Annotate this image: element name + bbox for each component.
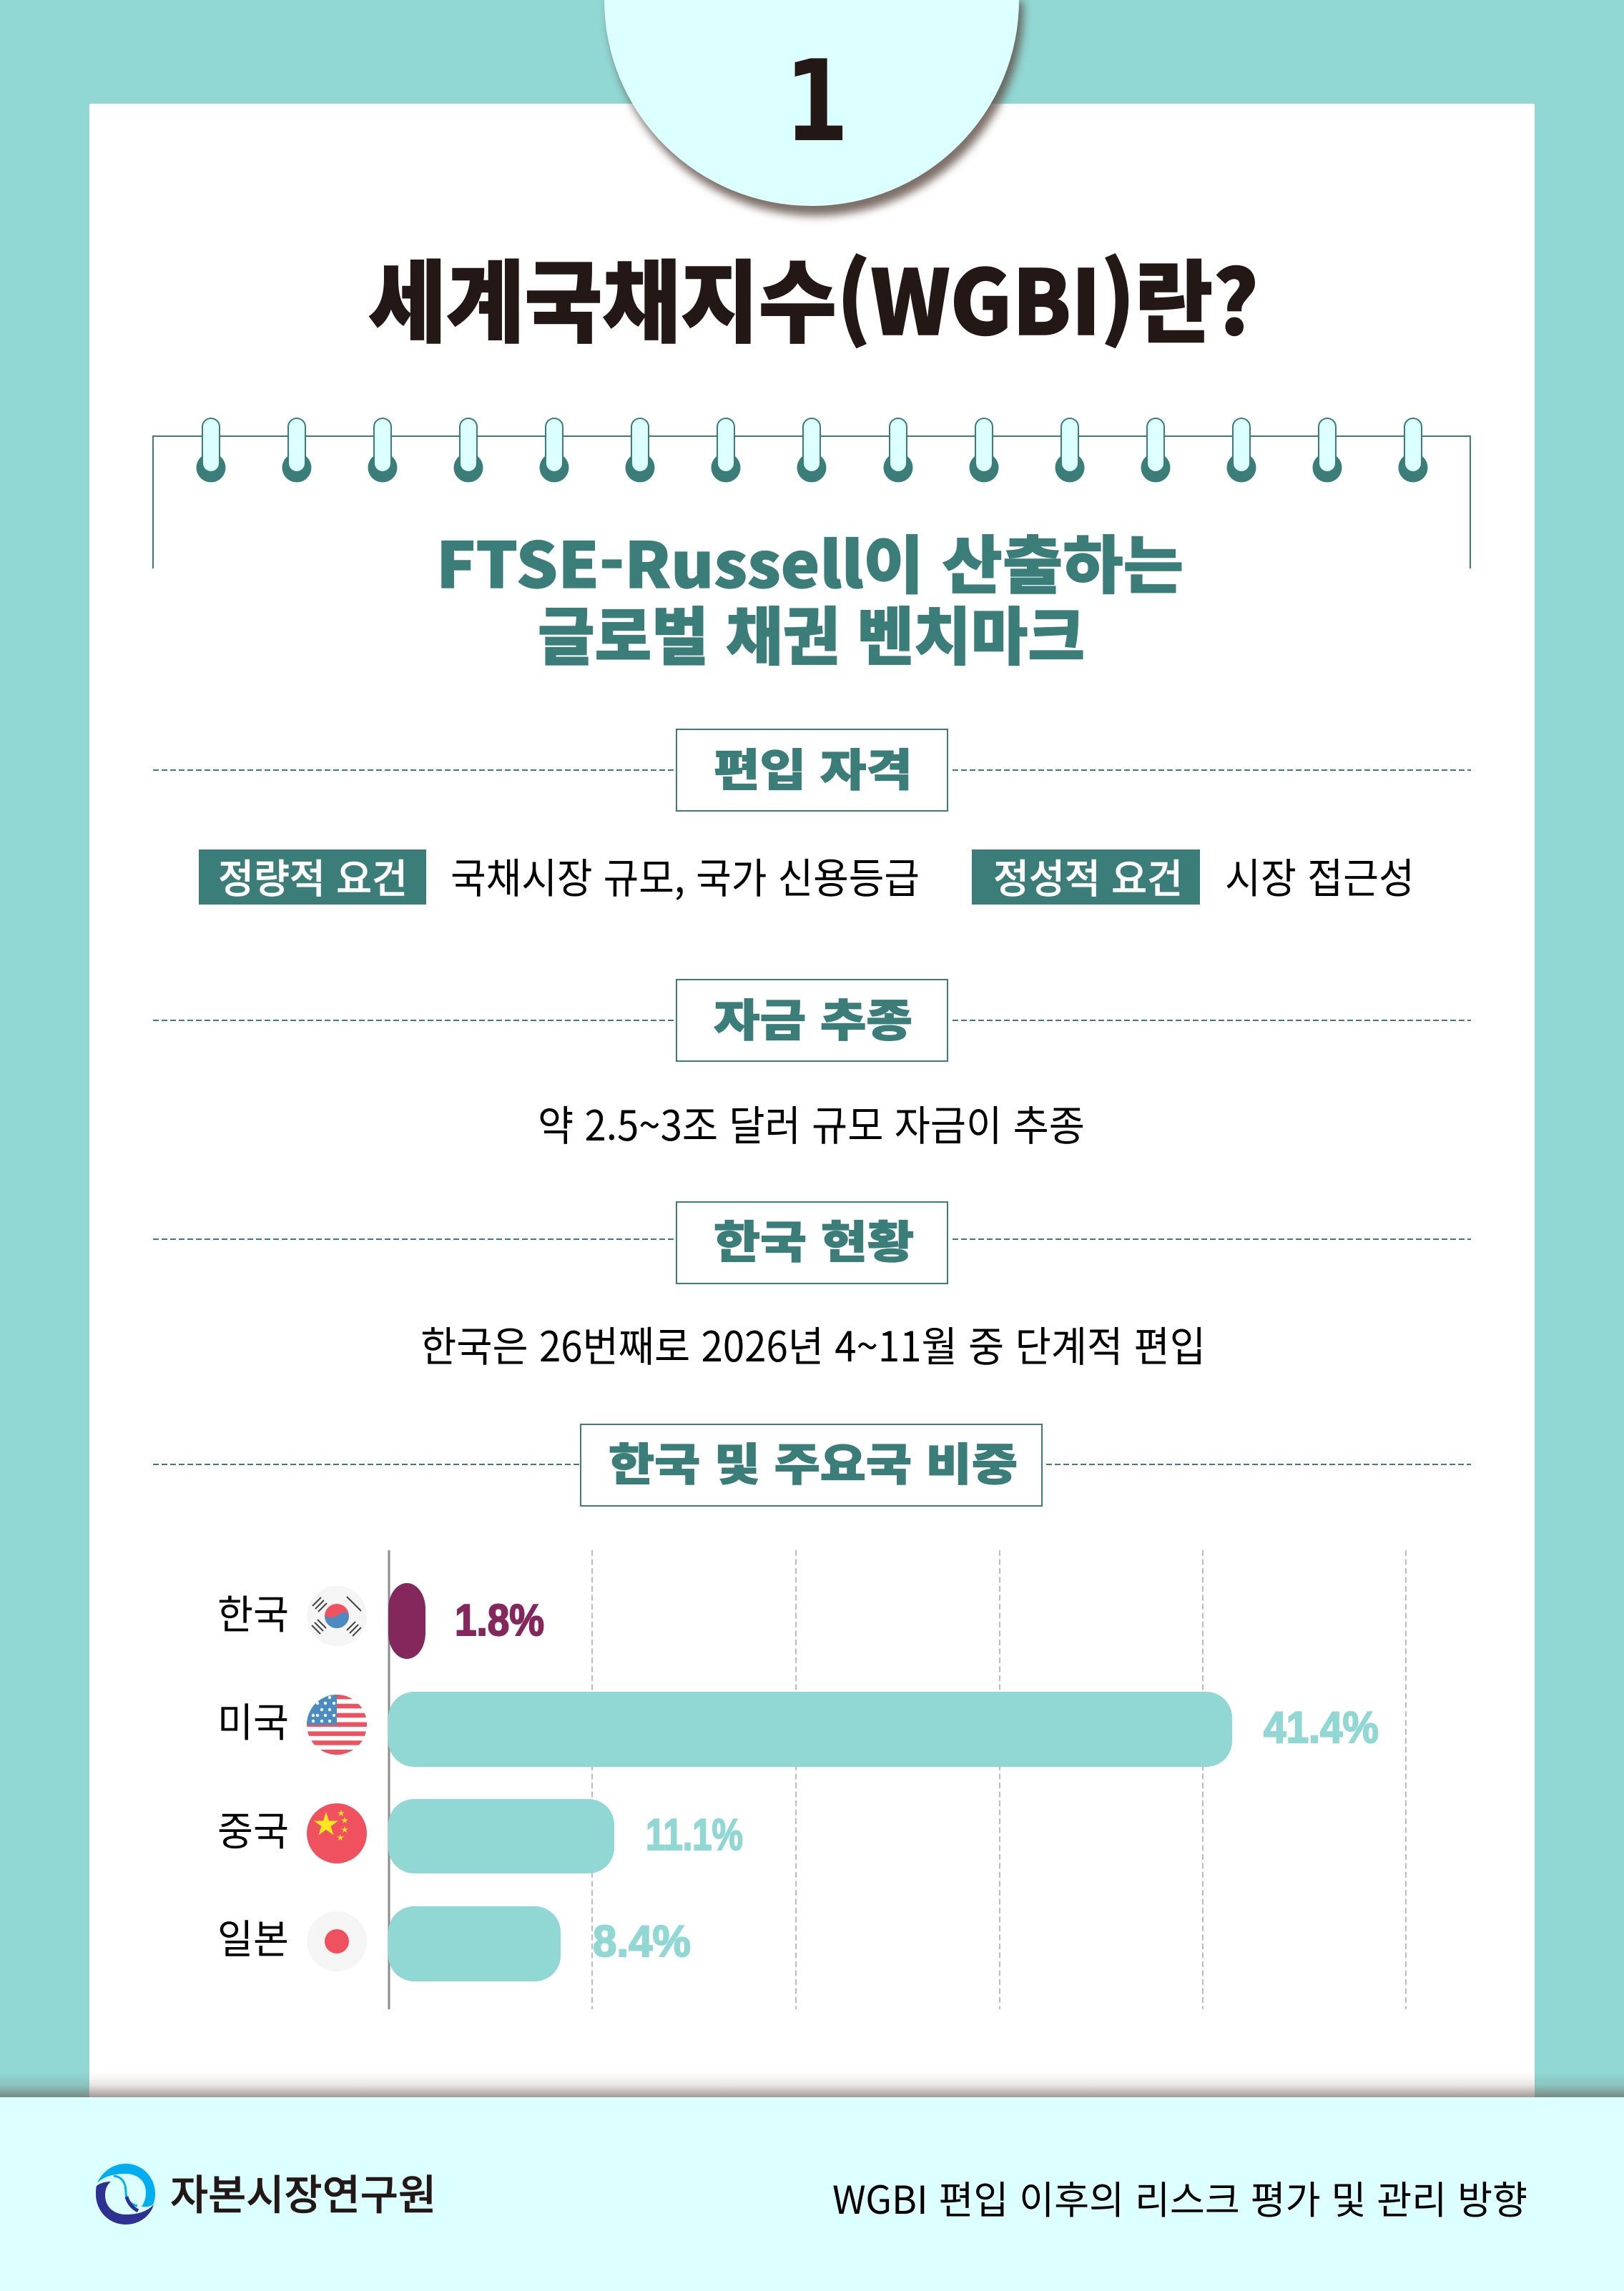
bar: 미국: [388, 1692, 1232, 1767]
subtitle: 글로벌 채권 벤치마크: [538, 587, 1085, 678]
text: 한국 편입 일정: 한국은 26번째로 2026년 4~11월 중 단계적 편입: [420, 1314, 1206, 1374]
number badge: 1: [784, 36, 849, 167]
section heading: 편입 자격: [153, 729, 1471, 811]
footer shadow: [0, 2072, 1624, 2097]
subtitle: FTSE-Russell이 산출하는: [436, 516, 1183, 606]
number badge: [604, 0, 1023, 216]
value: 중국: 11.1%: [646, 1810, 743, 1860]
footer: [0, 2097, 1624, 2291]
icon: 태극기: [307, 1586, 367, 1646]
label: 미국: 미국: [217, 1691, 289, 1749]
text: 정성적 요건 내용: 시장 접근성: [1225, 845, 1414, 905]
tag: 정량적 요건: 정량적 요건: [218, 847, 408, 905]
icon: 자본시장연구원 logo: [96, 2164, 155, 2225]
main white panel: [89, 104, 1535, 2106]
value: 일본: 8.4%: [593, 1917, 691, 1966]
icon: 성조기: [307, 1695, 367, 1755]
section heading: 한국 및 주요국 비중: 한국 및 주요국 비중: [609, 1429, 1018, 1493]
axis: [388, 1550, 390, 2009]
label: 중국: 중국: [217, 1800, 289, 1858]
section heading: 자금 추종: [153, 980, 1471, 1061]
logo text: 자본시장연구원: [170, 2162, 436, 2222]
value: 한국: 1.8%: [455, 1596, 544, 1645]
text: 자금 규모: 약 2.5~3조 달러 규모 자금이 추종: [538, 1093, 1085, 1153]
icon: 일장기: [307, 1911, 367, 1971]
section heading: 한국 현황: 한국 현황: [714, 1206, 914, 1271]
section heading: 자금 추종: 자금 추종: [714, 985, 912, 1049]
title: 세계국채지수(WGBI)란?: [368, 231, 1259, 360]
bar chart: [388, 1550, 1406, 2009]
tag: 정성적 요건: 정성적 요건: [993, 847, 1183, 905]
subtitle: [436, 516, 1183, 678]
section heading: 한국 현황: [153, 1202, 1471, 1284]
section heading: 편입 자격: 편입 자격: [714, 734, 912, 799]
value: 미국: 41.4%: [1264, 1703, 1379, 1753]
notebook frame with spiral rings: [153, 418, 1470, 568]
bar: 한국: [388, 1583, 425, 1659]
icon: 오성홍기: [307, 1803, 367, 1863]
label: 일본: 일본: [217, 1908, 289, 1966]
bar: 중국: [388, 1799, 614, 1873]
text: 정량적 요건 내용: 국채시장 규모, 국가 신용등급: [451, 845, 920, 905]
section heading: 한국 및 주요국 비중: [153, 1424, 1471, 1506]
label: 한국: 한국: [217, 1583, 289, 1641]
report title: WGBI 편입 이후의 리스크 평가 및 관리 방향: [832, 2169, 1527, 2225]
bar: 일본: [388, 1906, 561, 1981]
